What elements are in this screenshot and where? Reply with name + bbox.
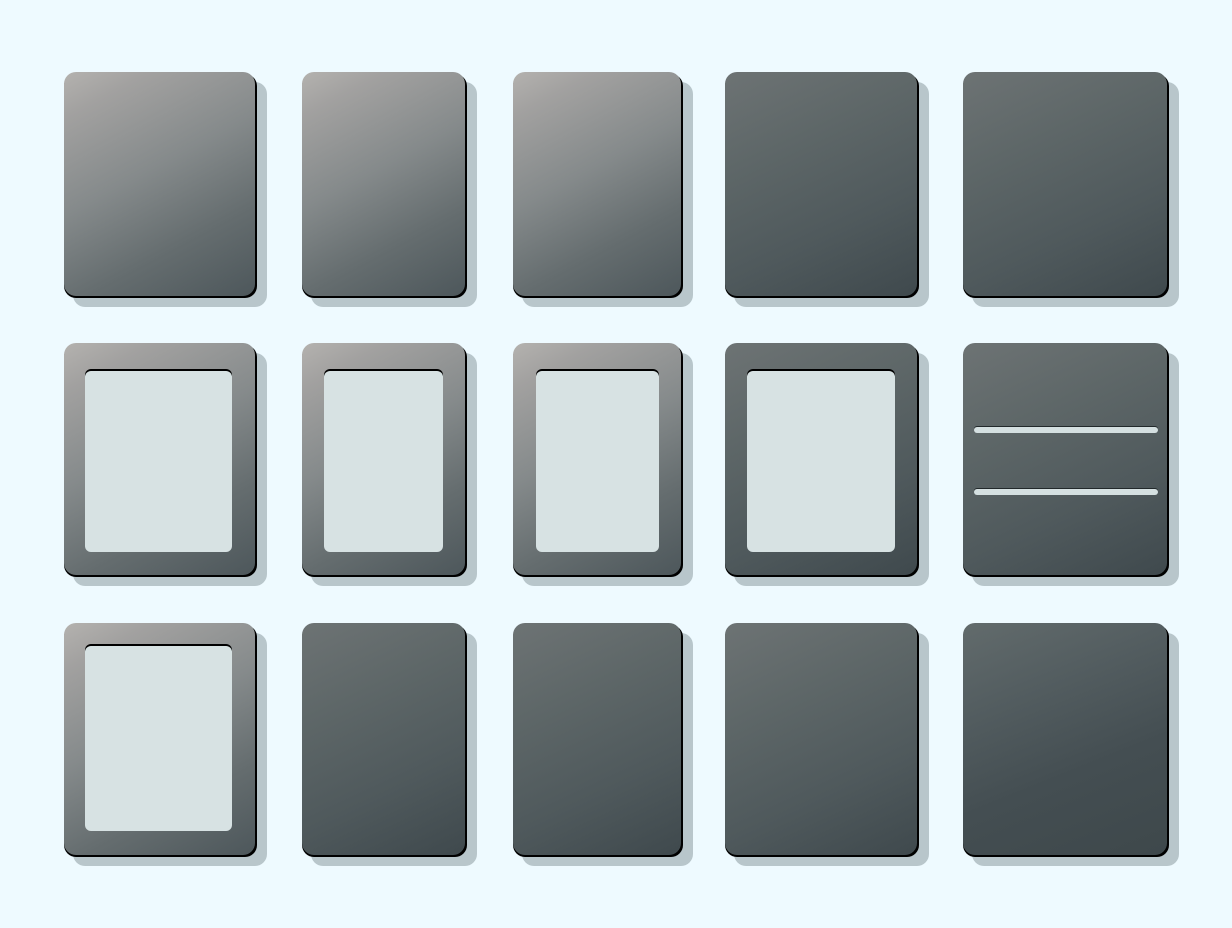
card: row 3 column 1 with inner panel (64, 623, 267, 866)
inner panel (536, 371, 659, 552)
card: row 1 column 1 (64, 72, 267, 307)
card: row 2 column 2 with inner panel (302, 343, 477, 586)
card: row 3 column 5 (963, 623, 1179, 866)
card: row 3 column 2 (302, 623, 477, 866)
upper line (974, 427, 1158, 433)
inner panel (85, 646, 232, 831)
card: row 1 column 2 (302, 72, 477, 307)
card: row 1 column 4 (725, 72, 929, 307)
lower line (974, 489, 1158, 495)
inner panel (85, 371, 232, 552)
card: row 2 column 4 with inner panel (725, 343, 929, 586)
inner panel (747, 371, 895, 552)
card: row 1 column 5 (963, 72, 1179, 307)
card: row 2 column 3 with inner panel (513, 343, 693, 586)
card: row 3 column 4 (725, 623, 929, 866)
inner panel (324, 371, 443, 552)
card: row 2 column 5 with two lines (963, 343, 1179, 586)
card: row 2 column 1 with inner panel (64, 343, 267, 586)
card: row 3 column 3 (513, 623, 693, 866)
card: row 1 column 3 (513, 72, 693, 307)
